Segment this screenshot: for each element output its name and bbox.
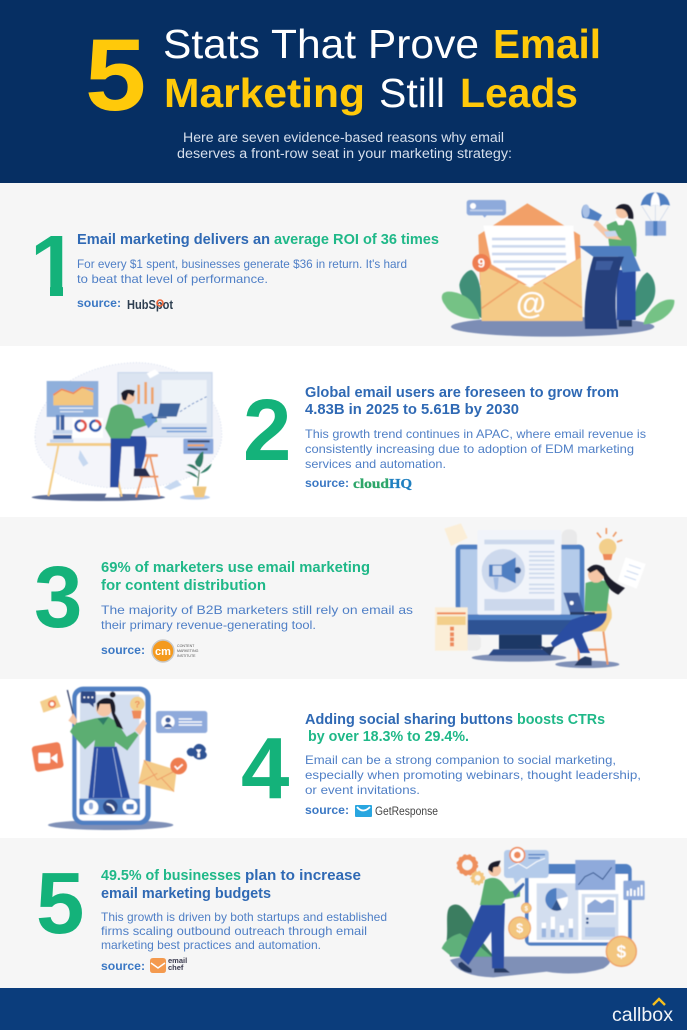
- illustration: email envelope and woman with megaphone: @: [516, 287, 546, 321]
- title: Still: [379, 70, 445, 116]
- callbox logo: callbox: [612, 1005, 674, 1026]
- stat 4 heading: by over 18.3% to 29.4%.: [308, 729, 469, 745]
- stat 5 source: chef: [168, 963, 184, 972]
- stat 4 body: or event invitations.: [305, 783, 420, 797]
- title: Email: [493, 21, 601, 67]
- number 2: 2: [243, 382, 291, 479]
- title: Marketing: [164, 70, 365, 116]
- stat 2 body: [305, 427, 646, 471]
- stat 4 body: Email can be a strong companion to social marketing,: [305, 753, 616, 767]
- stat 2 source: HQ: [389, 477, 412, 492]
- panel: stat 5: [0, 838, 687, 988]
- header banner: [0, 0, 687, 183]
- panel: stat 3: [0, 517, 687, 679]
- stat 5 heading: email marketing budgets: [101, 886, 271, 902]
- illustration: man with analytics dashboard and coins: $: [617, 942, 627, 962]
- stat 3 body: their primary revenue-generating tool.: [101, 618, 316, 632]
- illustration: man at desk with dashboards: [32, 363, 222, 501]
- stat 5 body: marketing best practices and automation.: [101, 938, 321, 952]
- stat 3 source: [101, 640, 199, 662]
- stat 1 source: source:: [77, 298, 121, 310]
- stat 2 body: services and automation.: [305, 457, 446, 471]
- big number 5: 5: [85, 19, 146, 132]
- illustration: man with analytics dashboard and coins: $: [516, 922, 523, 936]
- stat 2 heading: [305, 385, 619, 418]
- stat 1 source: [77, 298, 174, 312]
- stat 5 heading: 49.5% of businesses: [101, 868, 241, 884]
- stat 2 heading: Global email users are foreseen to grow from: [305, 385, 619, 401]
- stat 4 source: GetResponse: [375, 806, 438, 818]
- stat 5 source: email: [168, 956, 187, 965]
- illustration: email envelope and woman with megaphone: [442, 192, 674, 337]
- stat 1 heading: Email marketing delivers an: [77, 232, 270, 248]
- stat 3 heading: 69% of marketers use email marketing: [101, 560, 370, 576]
- stat 5 source: [101, 956, 187, 973]
- stat 2 heading: 4.83B in 2025 to 5.61B by 2030: [305, 402, 519, 418]
- illustration: woman on laptop beside large monitor: [435, 523, 646, 668]
- stat 3 source: CONTENT: [177, 644, 195, 648]
- stat 5 heading: plan to increase: [245, 868, 361, 884]
- stat 2 body: consistently increasing due to adoption of EDM marketing: [305, 442, 634, 456]
- stat 2 body: This growth trend continues in APAC, where email revenue is: [305, 427, 646, 441]
- stat 3 body: The majority of B2B marketers still rely on email as: [101, 603, 413, 617]
- illustration: woman presenting inside smartphone: ?: [134, 699, 140, 709]
- illustration: man with analytics dashboard and coins: $: [525, 906, 529, 912]
- number 5: 5: [36, 855, 84, 952]
- stat 4 heading: [305, 712, 605, 745]
- stat 3 heading: [101, 560, 370, 594]
- panel: stat 2: [0, 346, 687, 517]
- stat 3 body: [101, 603, 413, 632]
- title: [163, 21, 601, 116]
- panel: stat 4: [0, 679, 687, 838]
- title: Stats That Prove: [163, 21, 479, 67]
- stat 2 source: [305, 477, 412, 492]
- stat 4 source: source:: [305, 805, 349, 817]
- stat 2 source: cloud: [353, 477, 389, 492]
- stat 4 source: [305, 805, 438, 818]
- subtitle: Here are seven evidence-based reasons why email: [183, 130, 504, 145]
- stat 5 body: This growth is driven by both startups and established: [101, 910, 387, 924]
- stat 1 body: [77, 257, 407, 286]
- title: Leads: [460, 70, 578, 116]
- panel: stat 1: [0, 183, 687, 346]
- subtitle: deserves a front-row seat in your marketing strategy:: [177, 146, 512, 161]
- stat 1 source: HubSpot: [127, 298, 174, 312]
- illustration: man with analytics dashboard and coins: [442, 848, 645, 977]
- stat 4 heading: boosts CTRs: [517, 712, 605, 728]
- stat 3 source: INSTITUTE: [177, 654, 196, 658]
- stat 4 body: [305, 753, 641, 797]
- stat 4 body: especially when promoting webinars, thought leadership,: [305, 768, 641, 782]
- stat 2 source: source:: [305, 478, 349, 490]
- illustration: woman presenting inside smartphone: [31, 687, 207, 830]
- subtitle: [177, 130, 512, 161]
- stat 1 body: to beat that level of performance.: [77, 272, 268, 286]
- illustration: email envelope and woman with megaphone: 9: [478, 256, 485, 271]
- number 3: 3: [34, 549, 82, 646]
- stat 3 source: MARKETING: [177, 649, 199, 653]
- stat 3 heading: for content distribution: [101, 578, 266, 594]
- stat 5 body: [101, 910, 387, 952]
- stat 5 heading: [101, 868, 361, 902]
- stat 5 source: source:: [101, 961, 145, 973]
- stat 1 heading: average ROI of 36 times: [274, 232, 439, 248]
- stat 1 heading: [77, 232, 439, 248]
- stat 5 body: firms scaling outbound outreach through email: [101, 924, 367, 938]
- number 4: 4: [241, 720, 289, 817]
- stat 4 heading: Adding social sharing buttons: [305, 712, 513, 728]
- footer bar: [0, 988, 687, 1030]
- stat 3 source: source:: [101, 645, 145, 657]
- stat 3 source: cm: [155, 646, 171, 658]
- stat 1 body: For every $1 spent, businesses generate $36 in return. It's hard: [77, 257, 407, 271]
- number 1: 1: [30, 218, 78, 315]
